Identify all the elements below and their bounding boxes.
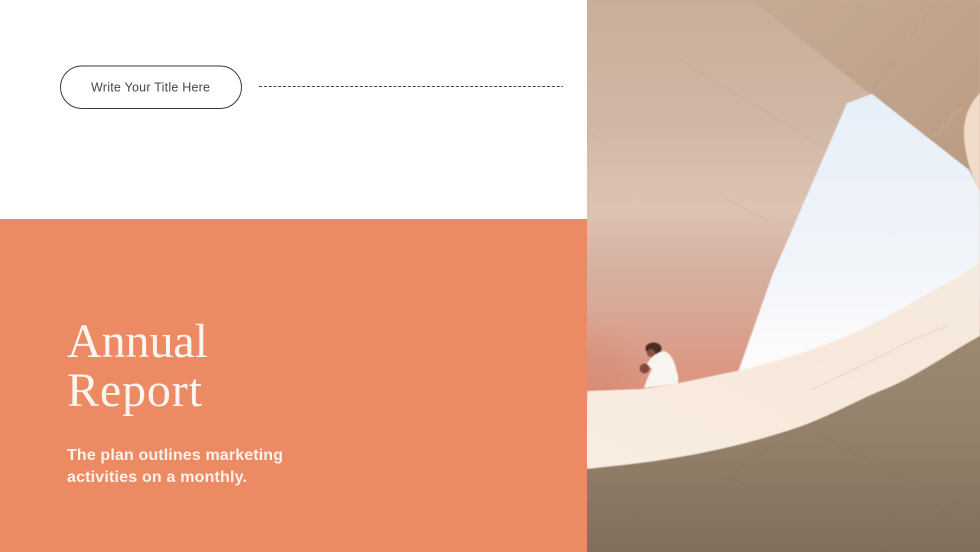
wall xyxy=(587,0,980,400)
subtitle: activities on a monthly. xyxy=(67,469,247,486)
hair and head xyxy=(646,342,662,354)
title: Report xyxy=(67,364,203,417)
ground xyxy=(587,330,980,552)
wall cracks xyxy=(587,60,820,222)
title: Annual xyxy=(67,315,208,368)
subtitle xyxy=(67,447,283,486)
sky xyxy=(737,94,980,375)
ledge xyxy=(587,262,980,469)
subtitle: The plan outlines marketing xyxy=(67,447,283,464)
ledge stains xyxy=(812,325,948,390)
upper right band xyxy=(752,0,980,200)
cylinder column xyxy=(964,93,980,192)
panel: orange block xyxy=(0,219,587,552)
person xyxy=(640,342,678,388)
ground seams xyxy=(720,430,980,552)
body xyxy=(644,351,678,388)
hands xyxy=(640,364,650,374)
dashed connector line xyxy=(259,86,563,88)
pill title xyxy=(60,66,242,108)
title xyxy=(67,315,208,417)
band cracks xyxy=(875,0,965,138)
wall warm shade xyxy=(587,348,610,404)
photo: architecture with person xyxy=(550,0,980,552)
pill title: Write Your Title Here xyxy=(91,80,210,94)
